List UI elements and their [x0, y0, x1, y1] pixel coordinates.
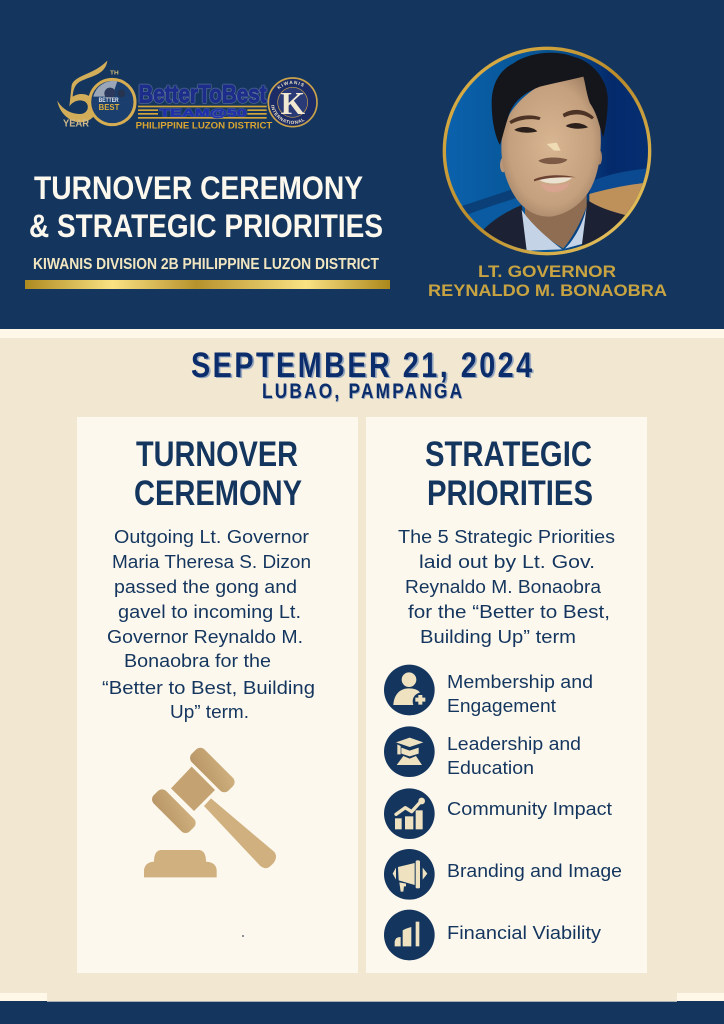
suit: [484, 200, 625, 250]
label: [447, 734, 581, 778]
label: [447, 672, 593, 716]
panel body text: [102, 527, 315, 722]
label: Financial Viability: [447, 923, 601, 943]
panel body text: Up” term.: [170, 702, 249, 722]
priority: branding and image: [384, 849, 622, 900]
panel body text: Maria Theresa S. Dizon: [112, 552, 311, 572]
shirt collar: [522, 210, 562, 251]
panel body text: gavel to incoming Lt.: [118, 602, 301, 622]
label: Leadership and: [447, 734, 581, 754]
icon: member add: [384, 665, 435, 715]
nose: [547, 143, 561, 151]
icon: 50th anniversary emblem: [57, 61, 135, 130]
panel body text: “Better to Best, Building: [102, 678, 315, 698]
label: Engagement: [447, 696, 556, 716]
footer strip: [0, 993, 724, 1024]
priority: financial viability: [384, 910, 601, 960]
hair: [492, 53, 608, 145]
panel body text: Reynaldo M. Bonaobra: [405, 577, 602, 597]
logo lockup: [57, 60, 318, 130]
wordmark: [136, 81, 273, 130]
mouth: [540, 183, 570, 192]
icon: Kiwanis International seal: K: [281, 86, 306, 121]
icon: bar chart: [384, 910, 435, 960]
panel body text: Bonaobra for the: [124, 651, 271, 671]
panel body text: [398, 527, 615, 647]
icon: 50th anniversary emblem: YEAR: [63, 119, 89, 130]
priority: leadership and education: [384, 726, 581, 778]
icon: Kiwanis International seal: [268, 77, 318, 128]
wordmark: BetterToBest: [138, 81, 267, 109]
panel heading: PRIORITIES: [427, 474, 593, 513]
icon: rising chart: [384, 788, 435, 839]
priority: membership and engagement: [384, 665, 593, 716]
panel body text: Outgoing Lt. Governor: [114, 527, 309, 547]
icon: Kiwanis International seal: KIWANIS: [277, 80, 304, 90]
neck: [525, 194, 587, 248]
panel heading: TURNOVER: [136, 435, 298, 474]
label: Education: [447, 758, 534, 778]
panel: turnover ceremony: [77, 417, 358, 973]
icon: 50th anniversary emblem: BEST: [99, 102, 120, 112]
gold divider bar: [25, 280, 390, 289]
name caption: [428, 262, 667, 300]
panel body text: for the “Better to Best,: [408, 602, 610, 622]
icon: 50th anniversary emblem: BETTER: [99, 98, 119, 104]
panel body text: Governor Reynaldo M.: [107, 627, 303, 647]
title: & STRATEGIC PRIORITIES: [29, 208, 383, 244]
panel heading: [425, 435, 593, 513]
ears: [500, 158, 504, 172]
icon: 50th anniversary emblem: TH: [110, 71, 119, 77]
portrait: Lt. Governor: [440, 47, 653, 267]
title: [29, 170, 383, 244]
beige body background: [0, 338, 724, 1001]
icon: gavel: [144, 745, 276, 877]
panel body text: laid out by Lt. Gov.: [419, 552, 595, 572]
panel heading: STRATEGIC: [425, 435, 592, 474]
priority: community impact: [384, 788, 612, 839]
icon: megaphone: [384, 849, 435, 900]
date heading: SEPTEMBER 21, 2024: [191, 345, 532, 385]
header band: [0, 0, 724, 329]
small dot: [242, 935, 244, 937]
panel heading: CEREMONY: [134, 474, 302, 513]
icon: Kiwanis International seal: INTERNATIONAL: [270, 105, 304, 124]
name caption: REYNALDO M. BONAOBRA: [428, 281, 667, 300]
location: LUBAO, PAMPANGA: [262, 381, 462, 403]
eyes: [514, 127, 537, 133]
wordmark: TEAM@50: [159, 108, 247, 120]
icon: graduation cap: [384, 726, 435, 777]
label: Membership and: [447, 672, 593, 692]
panel heading: [134, 435, 302, 513]
subtitle: KIWANIS DIVISION 2B PHILIPPINE LUZON DISTRICT: [33, 256, 379, 273]
panel body text: The 5 Strategic Priorities: [398, 527, 615, 547]
wordmark: PHILIPPINE LUZON DISTRICT: [136, 120, 273, 130]
face: [501, 73, 601, 217]
label: Branding and Image: [447, 861, 622, 881]
title: TURNOVER CEREMONY: [34, 170, 363, 206]
cream strip: [0, 329, 724, 338]
panel body text: Building Up” term: [420, 627, 576, 647]
name caption: LT. GOVERNOR: [478, 262, 616, 281]
panel body text: passed the gong and: [114, 577, 297, 597]
label: Community Impact: [447, 799, 612, 819]
panel: strategic priorities: [366, 417, 647, 973]
